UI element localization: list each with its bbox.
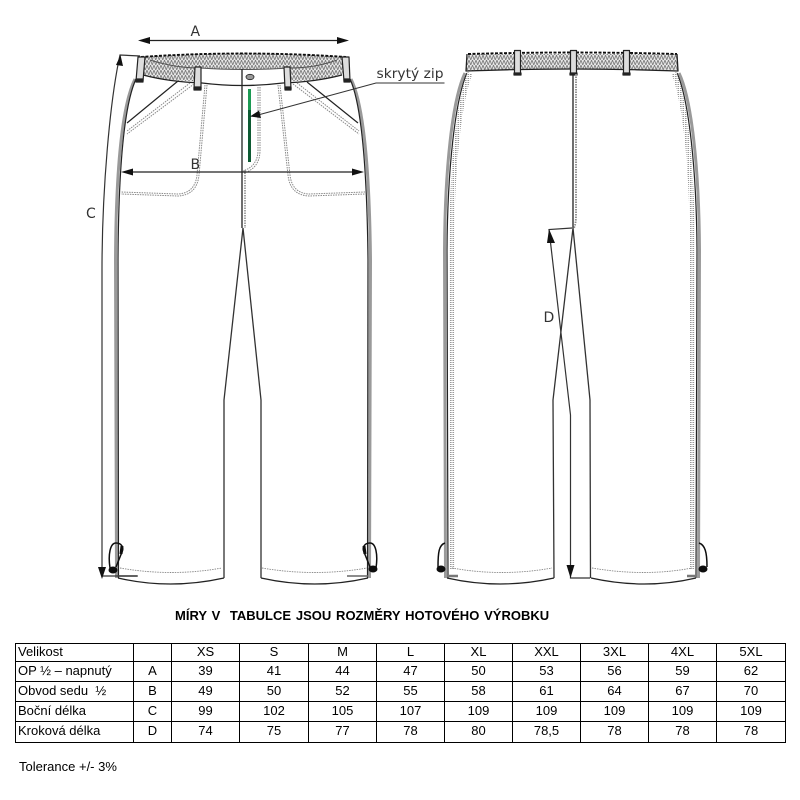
size table: Velikost — [18, 644, 63, 658]
size table: XXL — [534, 644, 559, 658]
size table: D — [148, 723, 157, 738]
icon: waist button — [246, 74, 254, 80]
size table: 64 — [607, 682, 622, 698]
back hems — [447, 568, 696, 584]
measure arrow B — [121, 157, 364, 176]
measure arrow A: A — [190, 24, 200, 40]
back drawcords — [437, 543, 707, 576]
size table: 62 — [744, 662, 758, 678]
size table: 105 — [332, 702, 353, 718]
size table: 52 — [335, 682, 350, 698]
size table: 53 — [539, 662, 554, 678]
size table: 44 — [335, 662, 350, 678]
size table: Kroková délka — [18, 723, 100, 738]
size table: 78,5 — [534, 723, 559, 738]
size table: 4XL — [671, 644, 694, 658]
front centre seam and fly — [242, 69, 260, 228]
size table: 78 — [403, 723, 418, 738]
front inner leg lines — [224, 228, 261, 578]
size table: A — [148, 662, 157, 678]
size table: M — [337, 644, 348, 658]
size table: S — [270, 644, 278, 658]
size table: 70 — [744, 682, 758, 698]
size table: 50 — [471, 662, 486, 678]
front elastic waistband — [141, 54, 346, 86]
size table: 3XL — [603, 644, 626, 658]
back elastic waistband — [466, 52, 678, 71]
size table: 5XL — [739, 644, 763, 658]
size table: XS — [197, 644, 214, 658]
size table: 75 — [267, 723, 281, 738]
size table: 55 — [403, 682, 418, 698]
size table: 109 — [536, 702, 557, 718]
measure arrow B: B — [190, 157, 200, 173]
front belt loops — [136, 57, 350, 90]
measure arrow D — [544, 228, 590, 578]
callout: hidden zip: skrytý zip — [376, 66, 444, 82]
size table: 58 — [471, 682, 486, 698]
size table: 78 — [675, 723, 690, 738]
size table: 56 — [607, 662, 622, 678]
size table: 78 — [744, 723, 758, 738]
front side seams — [116, 79, 370, 578]
size table: Boční délka — [18, 702, 86, 718]
size table — [15, 643, 786, 743]
size table: 109 — [672, 702, 693, 718]
size table: 59 — [675, 662, 690, 678]
measure arrow C — [86, 55, 140, 579]
size table: 47 — [403, 662, 418, 678]
size table: XL — [471, 644, 486, 658]
title: MÍRY V TABULCE JSOU ROZMĚRY HOTOVÉHO VÝROBKU — [175, 608, 549, 623]
size table: 39 — [198, 662, 213, 678]
size table: 77 — [335, 723, 350, 738]
size table: OP ½ – napnutý — [18, 662, 112, 678]
size table: 74 — [198, 723, 213, 738]
size table: 78 — [607, 723, 622, 738]
back side seams — [444, 73, 700, 578]
front pockets — [121, 81, 365, 196]
back centre seam — [573, 74, 576, 228]
size table: B — [148, 682, 157, 698]
front drawcords — [109, 543, 377, 576]
size table: 109 — [468, 702, 489, 718]
back view of trousers — [437, 50, 707, 584]
hidden zip in green — [248, 89, 251, 162]
front view of trousers — [109, 54, 377, 584]
size table: 99 — [198, 702, 213, 718]
measure arrow D: D — [544, 310, 554, 326]
callout: hidden zip — [250, 66, 444, 118]
technical drawing: front and back views of trousers — [86, 24, 708, 585]
size table: Obvod sedu ½ — [18, 682, 106, 698]
size table: 67 — [675, 682, 690, 698]
back inner leg lines — [553, 228, 590, 578]
size table: 49 — [198, 682, 213, 698]
size table: L — [407, 644, 414, 658]
size table: 61 — [539, 682, 554, 698]
size table: C — [148, 702, 157, 718]
measure arrow A — [138, 24, 349, 44]
size table: 109 — [604, 702, 625, 718]
tolerance note: Tolerance +/- 3% — [19, 759, 117, 774]
back belt loops — [514, 50, 630, 75]
size table: 107 — [400, 702, 421, 718]
size table: 109 — [740, 702, 762, 718]
size table: 80 — [471, 723, 486, 738]
size table: 102 — [263, 702, 285, 718]
measure arrow C: C — [86, 206, 96, 222]
size table: 41 — [267, 662, 281, 678]
size table: 50 — [267, 682, 281, 698]
front hems — [118, 568, 368, 584]
